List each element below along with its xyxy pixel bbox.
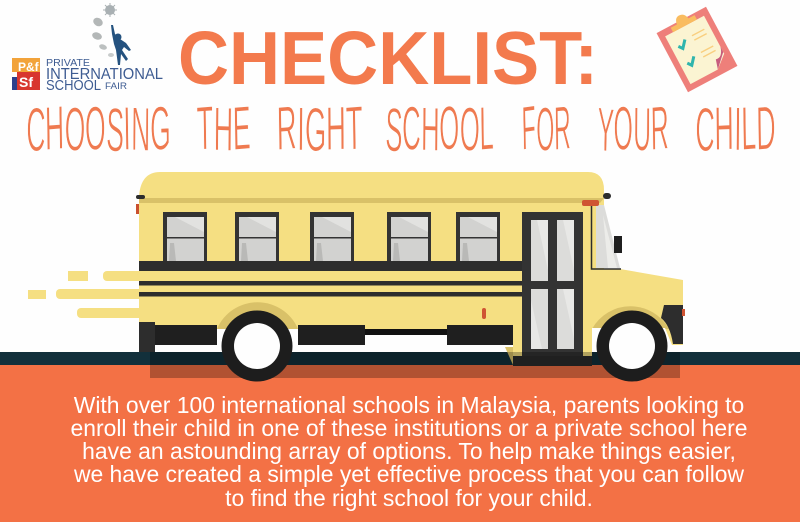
motion lines — [28, 271, 143, 318]
logo: Private International School Fair: PRIVATE — [46, 57, 90, 69]
rear bumper — [139, 322, 155, 352]
intro paragraph: to find the right school for your child. — [225, 485, 593, 511]
intro paragraph: we have created a simple yet effective process that you can follow — [73, 461, 745, 487]
subtitle — [26, 94, 776, 165]
logo: Private International School Fair: P&f — [18, 60, 40, 74]
subtitle: SCHOOL — [384, 94, 494, 165]
windshield — [582, 193, 622, 269]
logo: Private International School Fair — [12, 3, 163, 94]
road — [0, 352, 800, 366]
side stripes — [139, 261, 522, 296]
roof stripe — [139, 198, 604, 203]
door — [513, 212, 592, 366]
subtitle: CHOOSING — [26, 94, 171, 165]
intro paragraph: enroll their child in one of these institutions or a private school here — [71, 415, 747, 441]
bus body — [139, 172, 683, 356]
logo: Private International School Fair: SCHOOL — [46, 78, 101, 94]
intro paragraph: have an astounding array of options. To help make things easier, — [82, 438, 736, 464]
school bus — [136, 172, 685, 382]
subtitle: FOR — [519, 94, 571, 164]
front bumper — [661, 305, 683, 344]
intro paragraph — [71, 392, 747, 511]
ground shadow — [150, 352, 680, 378]
logo: Private International School Fair: Sf — [19, 74, 33, 90]
step wedge — [505, 347, 513, 365]
wheel arches — [217, 302, 684, 352]
icon: clipboard — [654, 2, 737, 92]
side windows — [163, 212, 500, 262]
logo: Private International School Fair: INTERNATIONAL — [46, 66, 163, 83]
subtitle: CHILD — [695, 94, 776, 165]
subtitle: RIGHT — [275, 94, 363, 165]
subtitle: YOUR — [596, 94, 669, 165]
rear lights — [136, 195, 145, 199]
marker light — [482, 308, 486, 319]
side skirt — [155, 325, 513, 345]
intro paragraph: With over 100 international schools in Malaysia, parents looking to — [74, 392, 744, 418]
subtitle: THE — [195, 94, 251, 164]
white underbody — [139, 345, 507, 352]
title: CHECKLIST: — [178, 16, 598, 100]
orange panel — [0, 365, 800, 522]
logo: Private International School Fair: FAIR — [105, 81, 128, 91]
rear wheel — [222, 310, 292, 382]
front wheel — [596, 310, 668, 382]
